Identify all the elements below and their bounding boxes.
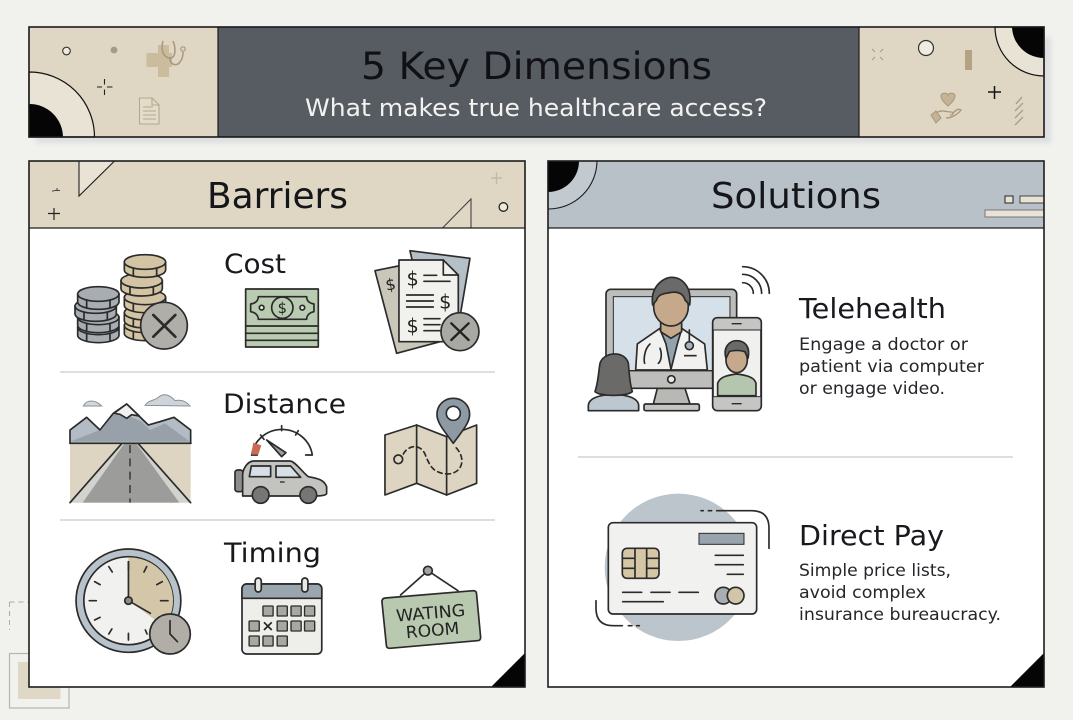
panel: solutions — [548, 161, 1044, 687]
icon: cash stack: $ — [278, 300, 287, 317]
icon: medical bills with x: $ — [406, 268, 419, 291]
direct pay description: Simple price lists, — [799, 561, 951, 581]
icon: map with pin — [385, 398, 477, 495]
telehealth description: Engage a doctor or — [799, 335, 968, 355]
title: 5 Key Dimensions — [361, 45, 712, 88]
icon: document — [140, 98, 159, 124]
heading: barriers: Barriers — [207, 176, 348, 217]
label: cost: Cost — [224, 249, 286, 280]
icon: heart in hand — [931, 93, 961, 123]
icon: medical bills with x: $ — [406, 315, 419, 338]
icon: medical cross with stethoscope — [146, 41, 185, 77]
icon: payment card — [596, 494, 769, 641]
background decoration: bottom-left squares — [10, 602, 69, 708]
label: distance: Distance — [223, 389, 346, 420]
icon: medical bills with x: $ — [439, 291, 451, 314]
subtitle: What makes true healthcare access? — [305, 94, 767, 122]
direct pay description — [799, 561, 1001, 625]
header left decorative panel — [29, 27, 218, 137]
header banner — [29, 27, 1044, 137]
icon: car with speedometer — [235, 426, 327, 503]
icon: calendar — [242, 578, 322, 654]
header title panel — [218, 27, 859, 137]
heading: telehealth: Telehealth — [798, 292, 946, 325]
icon: waiting room sign — [382, 566, 481, 648]
header right decorative panel — [859, 27, 1044, 137]
direct pay description: insurance bureaucracy. — [799, 605, 1001, 625]
direct pay description: avoid complex — [799, 583, 926, 603]
icon: medical bills with x: $ — [384, 274, 397, 295]
heading: direct pay: Direct Pay — [799, 519, 944, 552]
telehealth description — [799, 335, 984, 399]
icon: mountain road — [69, 395, 192, 503]
telehealth description: patient via computer — [799, 357, 984, 377]
label: timing: Timing — [223, 538, 321, 569]
barriers header band — [29, 161, 525, 228]
icon: telehealth devices — [588, 267, 769, 411]
panel: barriers — [29, 161, 525, 687]
icon: wall clock — [76, 549, 190, 654]
icon: medical bills with x — [375, 251, 479, 353]
heading: solutions: Solutions — [711, 176, 881, 217]
icon: waiting room sign: WATING — [395, 600, 466, 626]
icon: waiting room sign: ROOM — [405, 618, 460, 642]
telehealth description: or engage video. — [799, 379, 945, 399]
icon: coin stacks with x — [75, 255, 187, 349]
icon: cash stack — [246, 289, 318, 347]
header shadow — [36, 38, 1051, 143]
solutions header band — [548, 161, 1044, 228]
